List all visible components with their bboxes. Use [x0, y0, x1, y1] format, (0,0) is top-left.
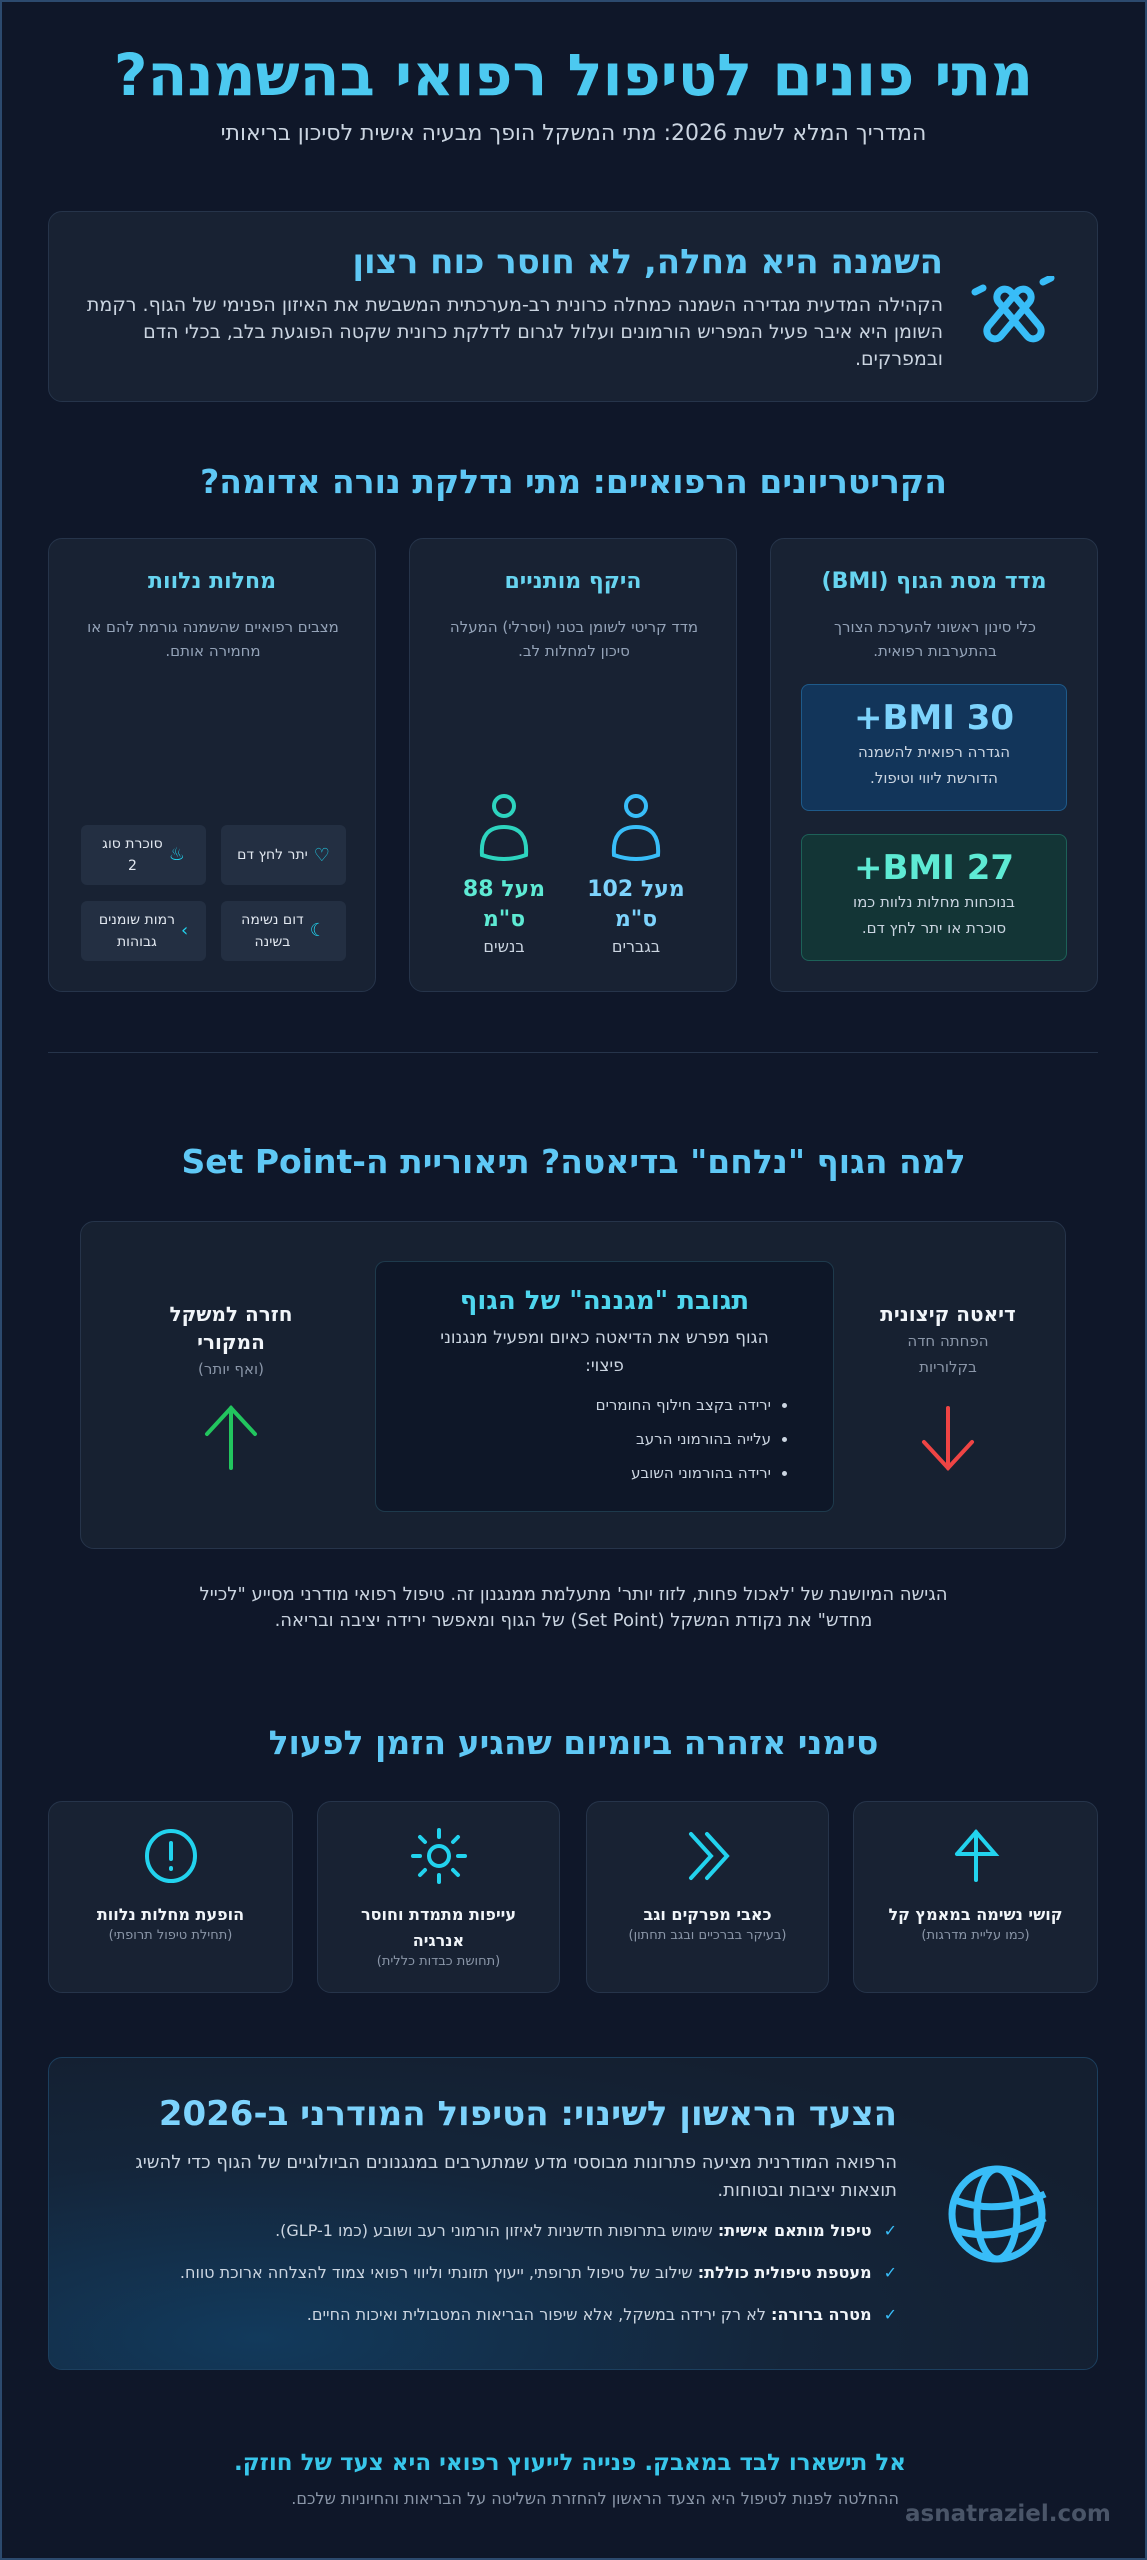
panel: BMI: כלי סינון ראשוני להערכת הצורך בהתערבות רפואית. [834, 618, 1036, 660]
panel: BMI: מדד מסת הגוף (BMI) [822, 569, 1046, 594]
panel: waist circumference [409, 538, 737, 992]
center: body defense: עלייה בהורמוני הרעב [636, 1430, 771, 1448]
chip: sleep apnea: דום נשימה [241, 912, 304, 928]
chip: diabetes: סוכרת סוג [102, 836, 163, 852]
panel: waist circumference: היקף מותניים [504, 569, 642, 594]
chip: diabetes [81, 825, 206, 885]
heading: השמנה היא מחלה, לא חוסר כוח רצון [352, 242, 943, 282]
section heading: set point: למה הגוף "נלחם" בדיאטה? תיאוריית ה-Set Point [181, 1142, 966, 1181]
checklist: ✓מעטפת טיפולית כוללת: שילוב של טיפול תרופתי, ייעוץ תזונתי וליווי רפואי צמוד להצלחה ארוכת טווח. [180, 2263, 897, 2282]
chip: diabetes: 2 [128, 858, 137, 874]
warning card: breathing: (כמו עליית מדרגות) [921, 1928, 1030, 1943]
center: body defense: הגוף מפרש את הדיאטה כאיום ומפעיל מנגנוני פיצוי: [440, 1328, 769, 1376]
warning card: comorbidities: הופעת מחלות נלוות [97, 1905, 244, 1924]
checklist: ✓טיפול מותאם אישית: שימוש בתרופות חדשניות לאיזון הורמוני רעב ושובע (כמו GLP-1). [275, 2221, 897, 2240]
weight regain column: המקורי [197, 1330, 265, 1354]
subtitle: המדריך המלא לשנת 2026: מתי המשקל הופך מבעיה אישית לסיכון בריאותי [221, 121, 926, 146]
weight regain column: (ואף יותר) [198, 1360, 264, 1378]
panel: obesity is a disease [48, 211, 1098, 402]
chip: sleep apnea: ☾ [310, 920, 326, 941]
title: מתי פונים לטיפול רפואי בהשמנה? [114, 41, 1033, 109]
center: body defense [375, 1261, 834, 1512]
extreme diet column: דיאטה קיצונית [880, 1302, 1016, 1326]
panel: BMI [770, 538, 1098, 992]
chip: hypertension [221, 825, 346, 885]
weight regain column: חזרה למשקל [169, 1302, 293, 1326]
footer subtext: ההחלטה לפנות לטיפול היא הצעד הראשון להחזרת השליטה על הבריאות והחיוניות שלכם. [291, 2489, 899, 2508]
BMI 30 box: הדורשת ליווי וטיפול. [870, 769, 998, 787]
checklist [180, 2221, 897, 2324]
extreme diet column: בקלוריות [919, 1358, 977, 1376]
warning card: comorbidities [48, 1801, 293, 1993]
BMI 27 box: סוכרת או יתר לחץ דם. [862, 919, 1006, 937]
warning card: joints [586, 1801, 829, 1993]
warning card: fatigue [317, 1801, 560, 1993]
women: בנשים [483, 937, 525, 956]
center: body defense: ירידה בקצב חילוף החומרים [596, 1396, 771, 1414]
arrow up [204, 1405, 258, 1470]
warning card: breathing: קושי נשימה במאמץ קל [888, 1905, 1063, 1924]
body text: הקהילה המדעית מגדירה השמנה כמחלה כרונית רב-מערכתית המשבשת את האיזון הפנימי של הגוף. רקמת השומן היא איבר פעיל המפריש הורמונים ועלול לגרום לדלקת כרונית שקטה הפוגעת בלב, בכלי הדם ובמפרקים. [87, 294, 943, 370]
panel: comorbidities: מצבים רפואיים שהשמנה גורמת להם או מחמירה אותם. [87, 618, 339, 660]
warning card: breathing [853, 1801, 1098, 1993]
panel: waist circumference: מדד קריטי לשומן בטני (ויסרלי) המעלה סיכון למחלות לב. [450, 618, 698, 660]
paragraph: הרפואה המודרנית מציעה פתרונות מבוססי מדע שמתערבים במנגנונים הביולוגיים של הגוף כדי להשיג תוצאות יציבות ובטוחות. [135, 2152, 897, 2201]
panel: comorbidities: מחלות נלוות [148, 569, 276, 594]
panel: comorbidities [48, 538, 376, 992]
chip: lipids: רמות שומנים [99, 912, 175, 928]
warning card: joints: כאבי מפרקים וגב [643, 1905, 772, 1924]
women [463, 794, 545, 956]
arrow down [922, 1406, 974, 1471]
warning card: fatigue: אנרגיה [413, 1931, 464, 1950]
heading: הצעד הראשון לשינוי: הטיפול המודרני ב-2026 [159, 2094, 897, 2134]
BMI 30 box [801, 684, 1067, 811]
men: ס"מ [615, 907, 657, 932]
chip: hypertension: ♡ [314, 844, 330, 866]
center: body defense: ירידה בהורמוני השובע [631, 1464, 771, 1482]
set point explanation: הגישה המיושנת של 'לאכול פחות, לזוז יותר' מתעלמת ממנגנון זה. טיפול רפואי מודרני מסייע "לכייל מחדש" את נקודת המשקל (Set Point) של הגוף ומאפשר ירידה יציבה ובריאה. [199, 1584, 948, 1631]
BMI 27 box [801, 834, 1067, 961]
footer call to action: אל תישארו לבד במאבק. פנייה לייעוץ רפואי היא צעד של חוזק. [234, 2450, 906, 2476]
men: מעל 102 [587, 877, 685, 902]
panel: set point diagram [80, 1221, 1066, 1549]
chip: sleep apnea: בשינה [254, 934, 290, 950]
women: מעל 88 [463, 877, 545, 902]
center: body defense: תגובת "מגננה" של הגוף [460, 1286, 749, 1316]
men [587, 794, 685, 956]
chip: lipids [81, 901, 206, 961]
weight regain column [169, 1302, 293, 1470]
chip: lipids: גבוהות [117, 934, 157, 950]
BMI 30 box: +BMI 30 [854, 698, 1014, 738]
BMI 30 box: הגדרה רפואית להשמנה [858, 743, 1010, 761]
warning card: comorbidities: (תחילת טיפול תרופתי) [109, 1928, 232, 1943]
warning card: joints: (בעיקר בברכיים ובגב תחתון) [629, 1928, 786, 1943]
warning card: fatigue: (תחושת כבדות כללית) [377, 1954, 500, 1969]
warning card: fatigue: עייפות מתמדת וחוסר [361, 1905, 516, 1924]
men: בגברים [612, 937, 660, 956]
watermark: asnatraziel.com [905, 2501, 1111, 2527]
icon: test tubes [972, 276, 1054, 342]
chip: diabetes: ♨ [169, 844, 185, 865]
section heading: criteria: הקריטריונים הרפואיים: מתי נדלקת נורה אדומה? [200, 462, 947, 501]
chip: sleep apnea [221, 901, 346, 961]
section heading: warning signs: סימני אזהרה ביומיום שהגיע הזמן לפעול [269, 1723, 878, 1762]
panel: modern treatment [48, 2057, 1098, 2370]
women: ס"מ [483, 907, 525, 932]
chip: hypertension: יתר לחץ דם [237, 847, 308, 863]
extreme diet column: הפחתה חדה [907, 1332, 989, 1350]
extreme diet column [880, 1302, 1016, 1471]
BMI 27 box: בנוכחות מחלות נלוות כמו [853, 893, 1015, 911]
chip: lipids: › [181, 920, 188, 941]
icon: globe [948, 2166, 1047, 2262]
BMI 27 box: +BMI 27 [854, 848, 1014, 888]
checklist: ✓מטרה ברורה: לא רק ירידה במשקל, אלא שיפור הבריאות המטבולית ואיכות החיים. [307, 2305, 897, 2324]
